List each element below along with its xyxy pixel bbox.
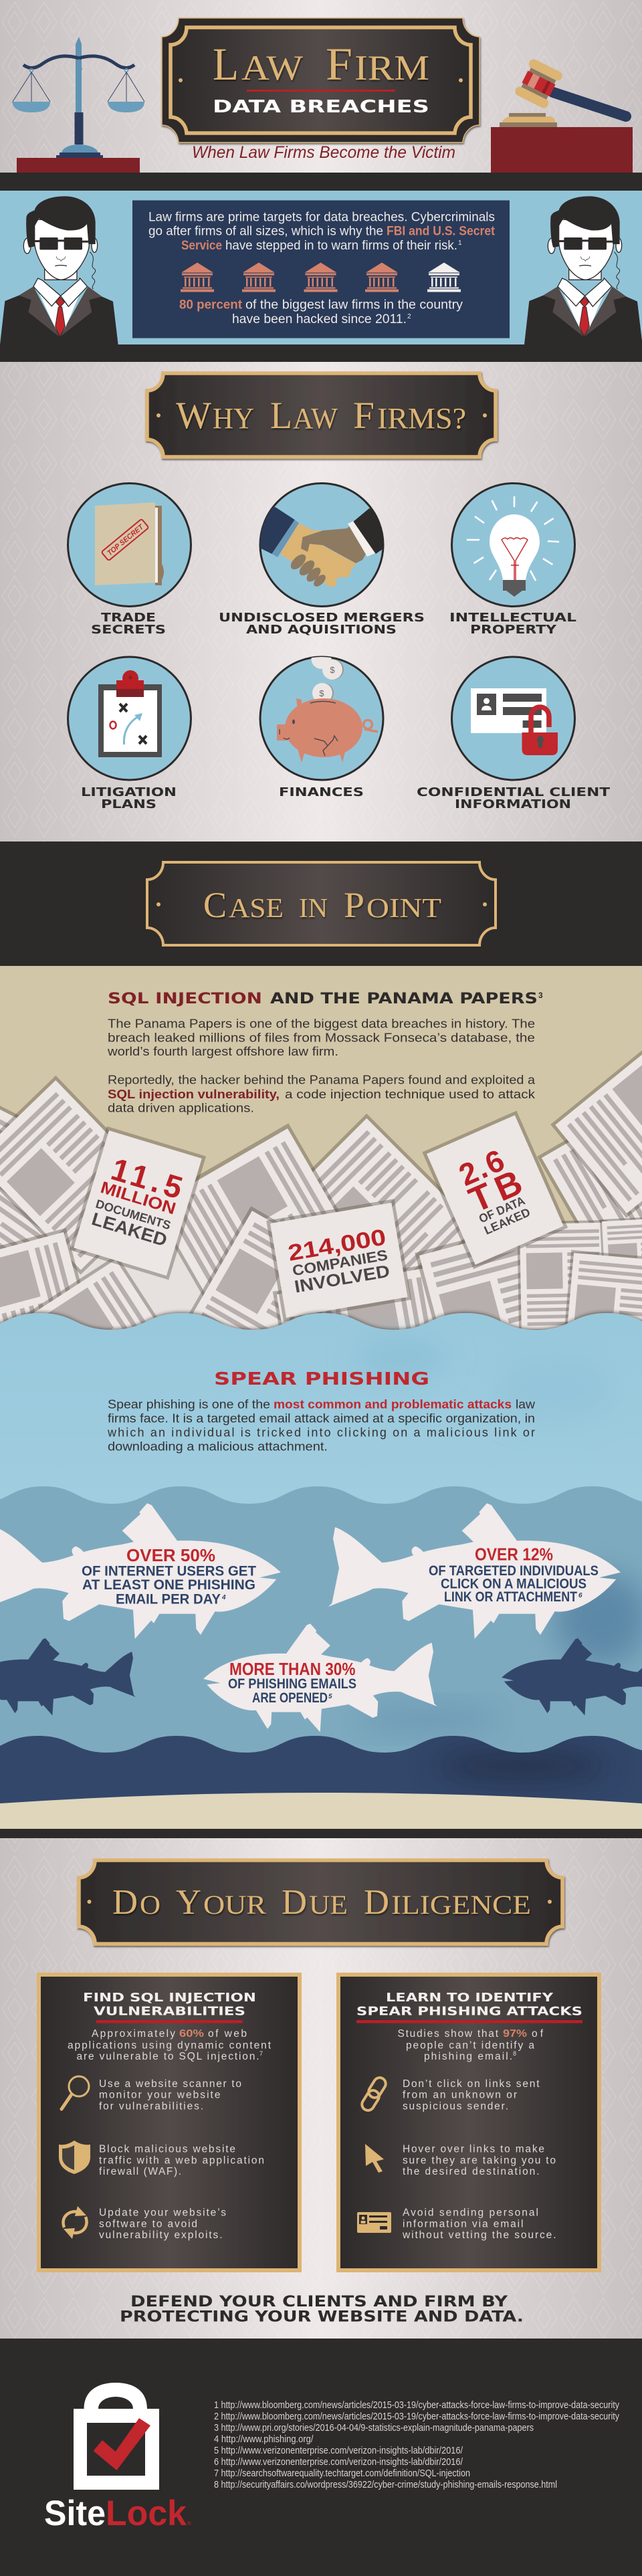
- plaque: do your due diligence: UE: [309, 1890, 348, 1920]
- heading: Law Firm: IRM: [354, 49, 429, 88]
- panel heading: [83, 1991, 256, 2023]
- logo: SiteLock: Site: [44, 2494, 106, 2533]
- plaque: do your due diligence: D: [364, 1883, 389, 1922]
- stat card: 11.5 million documents leaked: [70, 1126, 206, 1280]
- text: spear phishing description: law: [516, 1398, 536, 1411]
- fish stat: over 50%: OF INTERNET USERS GET: [82, 1563, 256, 1579]
- heading: spear phishing: SPEAR PHISHING: [214, 1369, 429, 1389]
- label: litigation plans: [81, 786, 177, 811]
- stat card: 11.5 million documents leaked: LEAKED: [90, 1209, 169, 1250]
- icon: piggy bank: $: [319, 688, 324, 698]
- dark water wave: [0, 1736, 642, 1833]
- label: finances: FINANCES: [279, 786, 364, 799]
- panel: intro text: FBI and U.S. Secret: [387, 223, 495, 238]
- heading: Data Breaches: DATA BREACHES: [213, 97, 429, 117]
- footer: [0, 2339, 642, 2576]
- mid water wave: [0, 1486, 642, 1833]
- intro band: [0, 173, 642, 362]
- call to action: PROTECTING YOUR WEBSITE AND DATA.: [120, 2309, 524, 2325]
- tip: hover over links: the desired destination.: [403, 2166, 539, 2177]
- fish stat: over 12%: LINK OR ATTACHMENT: [444, 1589, 577, 1605]
- panel stat text: 60%: [179, 2028, 204, 2040]
- fish stat: over 50%: [0, 1503, 281, 1639]
- tip: update software: vulnerability exploits.: [99, 2230, 222, 2241]
- panel stat text: of: [532, 2028, 544, 2040]
- heading: SQL injection and the Panama Papers: [108, 991, 543, 1007]
- icon: chain link: [360, 2076, 388, 2112]
- panel: intro text: 1: [458, 239, 462, 247]
- heading: SQL injection and the Panama Papers: SQL INJECTION: [108, 991, 262, 1007]
- plaque: why law firms: W: [176, 395, 211, 437]
- fish stat: more than 30%: OF PHISHING EMAILS: [228, 1676, 356, 1692]
- panel stat text: 97%: [503, 2028, 527, 2040]
- panel: intro text: of the biggest law firms in the country: [245, 297, 463, 312]
- text: spear phishing description: which an individual is tricked into clicking on a malicious link or: [107, 1426, 535, 1440]
- text: Panama Papers description: world’s fourth largest offshore law firm.: [107, 1045, 338, 1058]
- icon: cursor: [365, 2144, 384, 2173]
- panel heading: [356, 1991, 582, 2023]
- plaque: do your due diligence: O: [140, 1890, 160, 1920]
- fish stat: more than 30%: 5: [328, 1693, 332, 1700]
- label: undisclosed mergers: UNDISCLOSED MERGERS: [219, 611, 425, 625]
- panel: intro text: Law firms are prime targets for data breaches. Cybercriminals: [148, 210, 495, 225]
- icon: left agent: [0, 196, 118, 344]
- tip: hover over links: [403, 2143, 556, 2177]
- tip: web application firewall: firewall (WAF).: [99, 2166, 181, 2177]
- tip: do not click links: from an unknown or: [403, 2090, 517, 2100]
- plaque: case in point: C: [203, 885, 227, 925]
- label: trade secrets: [91, 611, 166, 637]
- tip: website scanner: [99, 2078, 241, 2112]
- label: confidential client information: INFORMATION: [455, 798, 571, 811]
- plaque: why law firms: HY: [213, 402, 254, 435]
- text: spear phishing description: Spear phishing is one of the: [108, 1398, 270, 1411]
- heading: Law Firm: [213, 39, 429, 90]
- label: confidential client information: [417, 786, 610, 811]
- panel: intro text: go after firms of all sizes, which is why the: [148, 223, 383, 238]
- heading: Law Firm: F: [326, 39, 352, 90]
- stat card: 2.6 TB of data leaked: [422, 1111, 568, 1269]
- subtitle: When Law Firms Become the Victim: [192, 143, 455, 162]
- header section: [0, 0, 642, 173]
- plaque: do your due diligence: D: [282, 1883, 307, 1922]
- plaque: case in point: IN: [299, 892, 328, 923]
- label: intellectual property: [449, 611, 576, 637]
- stat card: 11.5 million documents leaked: 11.5: [107, 1151, 187, 1205]
- panel heading: FIND SQL INJECTION: [83, 1991, 256, 2005]
- panel stat text: [397, 2028, 544, 2062]
- panel stat text: people can’t identify a: [406, 2040, 534, 2051]
- fish stat: more than 30%: MORE THAN 30%: [229, 1659, 356, 1679]
- icon: trade secrets folder: TOP SECRET: [106, 522, 146, 557]
- panel: intro text: 2: [407, 313, 411, 320]
- panel heading: SPEAR PHISHING ATTACKS: [356, 2004, 582, 2019]
- section: SQL injection: [0, 966, 642, 1444]
- tip: hover over links: Hover over links to make: [403, 2143, 544, 2155]
- heading: SQL injection and the Panama Papers: 3: [538, 991, 543, 1000]
- icon: law firm buildings, 80 percent: [181, 262, 461, 292]
- stat card: 2.6 TB of data leaked: OF DATA: [477, 1194, 527, 1225]
- label: undisclosed mergers: [219, 611, 425, 637]
- icon: confidential client card and lock: [452, 657, 575, 780]
- icon: magnifier: [62, 2076, 89, 2109]
- footnotes: 4 http://www.phishing.org/: [214, 2434, 314, 2445]
- stat card: 2.6 TB of data leaked: LEAKED: [482, 1205, 532, 1237]
- section: case in point banner: [0, 841, 642, 966]
- icon: piggy bank: $: [330, 665, 335, 675]
- plaque: why law firms: [147, 373, 496, 457]
- call to action: [120, 2294, 524, 2325]
- tip: update software: [99, 2207, 226, 2241]
- panel: find SQL injection vulnerabilities: [39, 1975, 300, 2270]
- call to action: DEFEND YOUR CLIENTS AND FIRM BY: [130, 2294, 508, 2310]
- stat card: 11.5 million documents leaked: MILLION: [98, 1178, 178, 1218]
- stat card: 2.6 TB of data leaked: 2.6: [454, 1143, 510, 1193]
- panel stat text: 7: [259, 2050, 263, 2057]
- label: trade secrets: SECRETS: [91, 623, 166, 637]
- illustration: pile of papers: [0, 1023, 642, 1444]
- panel heading: VULNERABILITIES: [94, 2004, 245, 2019]
- tip: website scanner: for vulnerabilities.: [99, 2100, 203, 2112]
- icon: handshake: [254, 483, 388, 606]
- icon: scales of justice: [12, 37, 144, 173]
- text: Panama Papers description: SQL injection vulnerability,: [108, 1088, 280, 1101]
- heading: Law Firm: L: [213, 39, 239, 90]
- logo: SiteLock: Lock: [106, 2494, 187, 2533]
- fish stat: over 50%: AT LEAST ONE PHISHING: [82, 1577, 255, 1593]
- tip: do not click links: Don’t click on links sent: [403, 2078, 540, 2090]
- panel heading: LEARN TO IDENTIFY: [386, 1991, 554, 2005]
- stat card: 214,000 companies involved: [266, 1199, 411, 1322]
- tip: website scanner: monitor your website: [99, 2090, 221, 2100]
- fish stat: over 12%: OF TARGETED INDIVIDUALS: [429, 1563, 599, 1579]
- text: Panama Papers description: breach leaked millions of files from Mossack Fonseca’s database, the: [108, 1031, 535, 1045]
- label: litigation plans: LITIGATION: [81, 786, 177, 799]
- panel stat text: phishing email.: [424, 2051, 512, 2062]
- text: Panama Papers description: data driven applications.: [108, 1102, 254, 1115]
- footnotes: 3 http://www.pri.org/stories/2016-04-04/9-statistics-explain-magnitude-panama-papers: [214, 2422, 534, 2434]
- label: confidential client information: CONFIDENTIAL CLIENT: [417, 786, 610, 799]
- dark fish left: [0, 1638, 136, 1715]
- panel stat text: are vulnerable to SQL injection.: [76, 2051, 259, 2062]
- stat card: 214,000 companies involved: INVOLVED: [293, 1261, 391, 1296]
- icon: ID card: [357, 2212, 391, 2233]
- text: Panama Papers description: a code injection technique used to attack: [285, 1088, 536, 1101]
- panel stat text: Studies show that: [397, 2028, 499, 2040]
- footnotes: [214, 2399, 619, 2490]
- panel: learn to identify spear phishing attacks: [338, 1975, 599, 2270]
- logo: SiteLock: ®: [187, 2520, 191, 2527]
- icon: trade secrets folder: [68, 483, 191, 606]
- tip: avoid sending personal information: information via email: [403, 2218, 523, 2230]
- section: spear phishing water: [0, 1313, 642, 1833]
- tip: web application firewall: [99, 2143, 264, 2177]
- fish stat: over 50%: EMAIL PER DAY: [116, 1591, 221, 1607]
- text: Panama Papers description: Reportedly, the hacker behind the Panama Papers found and exploited a: [108, 1073, 536, 1086]
- text: Panama Papers description: The Panama Papers is one of the biggest data breaches in history. The: [108, 1017, 535, 1031]
- tip: web application firewall: Block malicious website: [99, 2143, 235, 2155]
- tip: hover over links: sure they are taking you to: [403, 2155, 556, 2166]
- fish stat: more than 30%: ARE OPENED: [252, 1690, 328, 1706]
- section: due diligence: [0, 1829, 642, 2339]
- panel stat text: Approximately: [92, 2028, 175, 2040]
- plaque: do your due diligence: D: [112, 1883, 138, 1922]
- footnotes: 6 http://www.verizonenterprise.com/verizon-insights-lab/dbir/2016/: [214, 2456, 463, 2468]
- icon: right agent: [524, 196, 642, 344]
- fish stat: over 50%: OVER 50%: [126, 1545, 215, 1565]
- icon: shield: [59, 2141, 90, 2174]
- panel: intro text: Service: [181, 238, 222, 253]
- stat card: 11.5 million documents leaked: DOCUMENTS: [94, 1197, 173, 1232]
- plaque: do your due diligence: OUR: [203, 1890, 266, 1920]
- plaque: why law firms: IRMS?: [377, 402, 466, 435]
- tip: do not click links: suspicious sender.: [403, 2100, 508, 2112]
- tip: avoid sending personal information: [402, 2207, 556, 2241]
- stat card: 214,000 companies involved: 214,000: [286, 1224, 388, 1266]
- plaque: why law firms: F: [353, 395, 374, 437]
- tip: avoid sending personal information: Avoid sending personal: [403, 2207, 538, 2218]
- panel: intro text: [132, 201, 510, 338]
- tip: web application firewall: traffic with a web application: [99, 2155, 264, 2166]
- fish stat: over 12%: CLICK ON A MALICIOUS: [441, 1576, 586, 1592]
- fish stat: over 50%: 4: [221, 1594, 226, 1601]
- panel stat text: of web: [208, 2028, 247, 2040]
- stat card: 214,000 companies involved: COMPANIES: [291, 1246, 389, 1279]
- label: trade secrets: TRADE: [101, 611, 156, 625]
- panel stat text: 8: [513, 2050, 516, 2057]
- icon: light bulb: [452, 483, 575, 606]
- tip: avoid sending personal information: without vetting the source.: [402, 2230, 556, 2241]
- plaque: case in point: ASE: [229, 892, 284, 923]
- title plaque: [162, 18, 479, 142]
- plaque: why law firms: L: [270, 395, 292, 437]
- label: litigation plans: PLANS: [101, 798, 156, 811]
- plaque: case in point: P: [344, 885, 364, 925]
- text: spear phishing description: firms face. It is a targeted email attack aimed at a specific organization, in: [108, 1411, 535, 1425]
- plaque: why law firms: AW: [293, 402, 338, 435]
- text: spear phishing description: [107, 1398, 536, 1453]
- fish stat: over 12%: [328, 1503, 621, 1639]
- panel stat text: applications using dynamic content: [68, 2040, 272, 2051]
- icon: litigation clipboard: [68, 657, 191, 780]
- panel: intro text: have been hacked since 2011.: [232, 312, 407, 326]
- fish stat: over 12%: OVER 12%: [475, 1545, 553, 1565]
- stat card: 2.6 TB of data leaked: TB: [463, 1163, 528, 1220]
- tip: website scanner: Use a website scanner to: [99, 2078, 241, 2090]
- fish stat: over 12%: 6: [578, 1592, 582, 1599]
- label: intellectual property: INTELLECTUAL: [449, 611, 576, 625]
- section: why law firms: [0, 362, 642, 841]
- icon: gavel: [491, 58, 633, 173]
- icon: piggy bank: [260, 649, 383, 780]
- heading: Law Firm: AW: [241, 49, 303, 88]
- panel: intro text: 80 percent: [179, 297, 242, 312]
- label: undisclosed mergers: AND AQUISITIONS: [246, 623, 397, 637]
- plaque: case in point: OINT: [366, 892, 441, 923]
- footnotes: 8 http://securityaffairs.co/wordpress/36922/cyber-crime/study-phishing-emails-response.html: [214, 2479, 557, 2490]
- panel stat text: [68, 2028, 272, 2062]
- dark fish right: [502, 1638, 642, 1715]
- label: intellectual property: PROPERTY: [470, 623, 556, 637]
- plaque: do your due diligence: Y: [176, 1883, 201, 1922]
- plaque: do your due diligence: [79, 1860, 562, 1944]
- fish stat: more than 30%: [203, 1623, 437, 1732]
- tip: update software: software to avoid: [99, 2218, 197, 2230]
- sea floor sand: [0, 1793, 642, 1829]
- text: Panama Papers description: [107, 1017, 536, 1115]
- tip: update software: Update your website’s: [99, 2207, 226, 2218]
- footnotes: 7 http://searchsoftwarequality.techtarget.com/definition/SQL-injection: [214, 2468, 470, 2479]
- icon: refresh: [64, 2206, 87, 2239]
- tip: do not click links: [403, 2078, 540, 2112]
- logo: SiteLock: [44, 2383, 191, 2533]
- text: spear phishing description: downloading a malicious attachment.: [108, 1440, 328, 1453]
- plaque: do your due diligence: ILIGENCE: [391, 1890, 531, 1920]
- panel: intro text: have stepped in to warn firms of their risk.: [225, 238, 457, 253]
- plaque: case in point: [147, 862, 496, 945]
- heading: SQL injection and the Panama Papers: AND THE PANAMA PAPERS: [270, 991, 538, 1007]
- text: spear phishing description: most common and problematic attacks: [274, 1398, 512, 1411]
- footnotes: 5 http://www.verizonenterprise.com/verizon-insights-lab/dbir/2016/: [214, 2445, 463, 2456]
